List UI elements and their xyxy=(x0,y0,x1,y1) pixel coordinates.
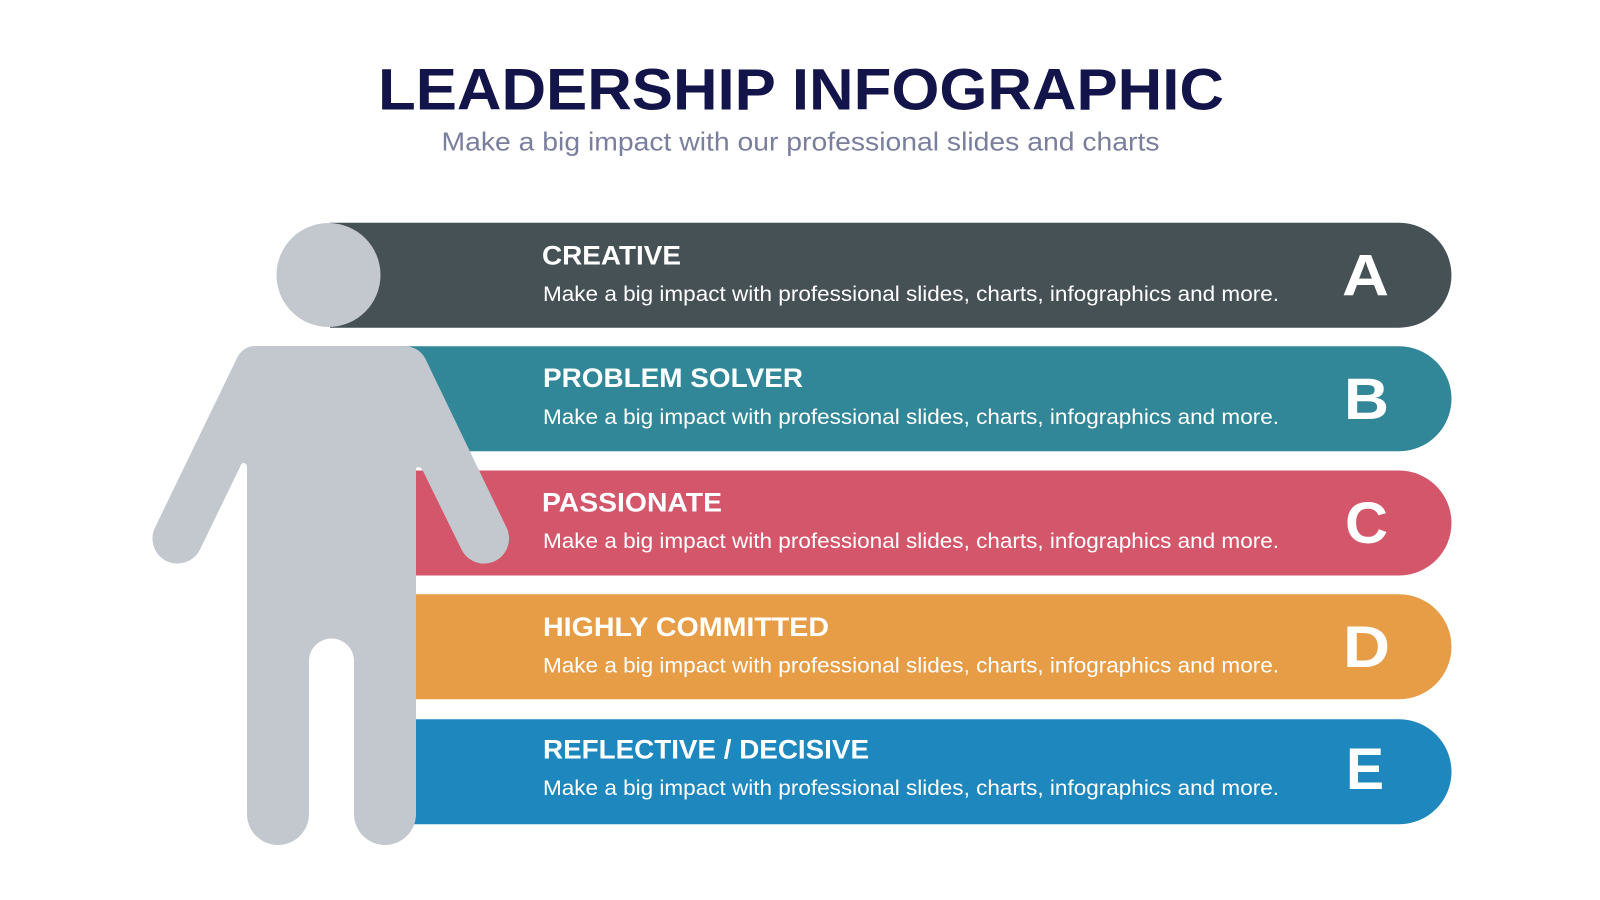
subtitle: Make a big impact with our professional slides and charts xyxy=(442,126,1160,156)
panel: reflective / decisive xyxy=(410,719,1452,824)
panel: highly committed xyxy=(410,594,1452,699)
panel: highly committed: D xyxy=(1343,615,1390,680)
panel: problem solver xyxy=(400,346,1452,451)
panel: highly committed: Make a big impact with professional slides, charts, infographics and more. xyxy=(543,654,1279,678)
panel: problem solver: PROBLEM SOLVER xyxy=(543,363,803,393)
panel: passionate xyxy=(410,470,1452,576)
title: LEADERSHIP INFOGRAPHIC xyxy=(378,58,1224,122)
panel: reflective / decisive: Make a big impact with professional slides, charts, infographics and more. xyxy=(543,776,1279,800)
panel: highly committed: HIGHLY COMMITTED xyxy=(543,612,829,642)
panel: passionate: C xyxy=(1345,491,1388,556)
panel: passionate: Make a big impact with professional slides, charts, infographics and more. xyxy=(543,529,1279,553)
panel: creative: Make a big impact with professional slides, charts, infographics and more. xyxy=(543,282,1279,306)
panel: problem solver: Make a big impact with professional slides, charts, infographics and more. xyxy=(543,405,1279,429)
panel: passionate: PASSIONATE xyxy=(542,488,722,518)
panel: creative: CREATIVE xyxy=(542,240,681,270)
panel: reflective / decisive: E xyxy=(1346,737,1384,802)
panel: creative xyxy=(330,223,1451,328)
panel: problem solver: B xyxy=(1344,367,1389,432)
icon: person figure xyxy=(152,223,509,845)
panel: creative: A xyxy=(1342,244,1389,308)
panel: reflective / decisive: REFLECTIVE / DECISIVE xyxy=(543,734,869,764)
